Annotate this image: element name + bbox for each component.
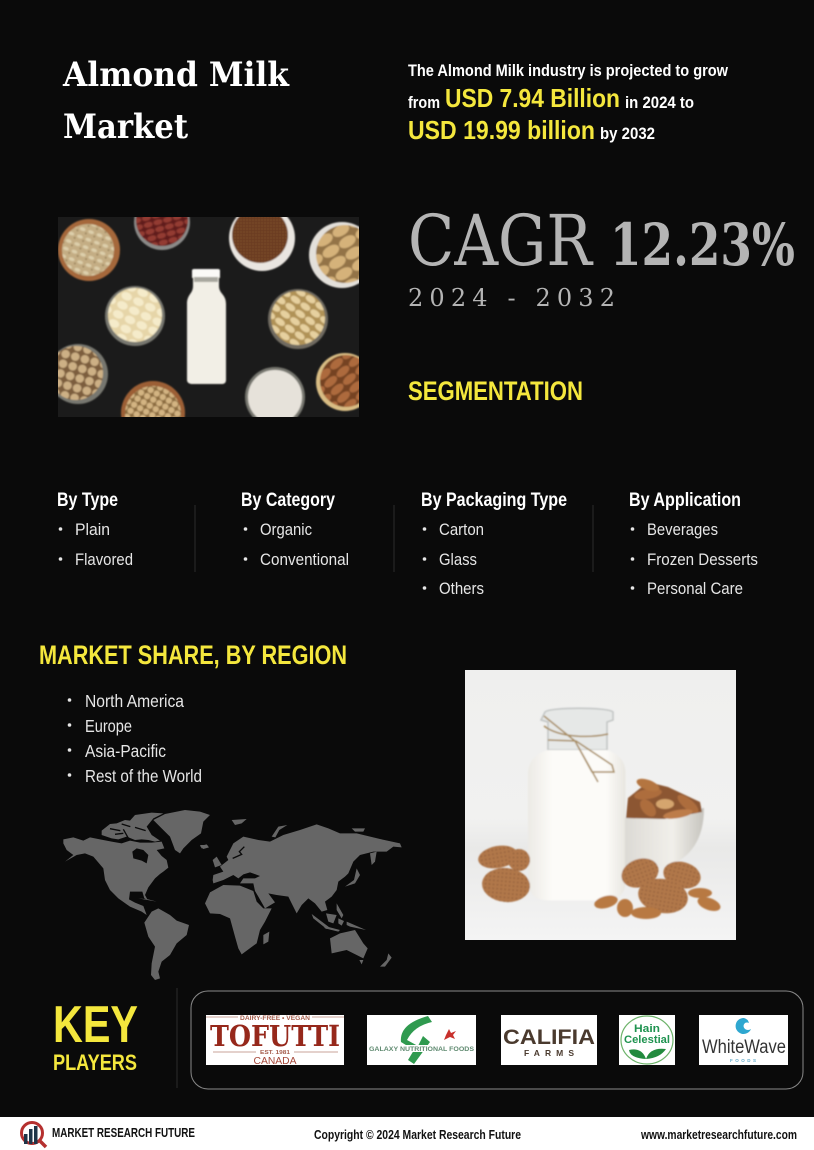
Europe, Africa, Asia and Oceania — [200, 819, 402, 967]
footer copyright: Copyright © 2024 Market Research Future — [314, 1127, 521, 1142]
bowl — [625, 808, 704, 866]
segmentation: by type — [57, 490, 133, 569]
milk bottle — [187, 269, 226, 384]
CAGR figure — [408, 200, 795, 282]
region list: Asia-Pacific — [85, 741, 166, 761]
title: Almond Milk — [62, 55, 290, 95]
logo: Hain Celestial: Hain — [634, 1023, 660, 1035]
segmentation: by packaging type: Others — [439, 579, 484, 598]
segmentation: by category: Conventional — [260, 550, 349, 569]
bowl: hazelnuts — [58, 343, 109, 405]
loose almonds — [593, 888, 722, 919]
footer — [0, 1117, 814, 1150]
logo: WhiteWave Foods: WhiteWave — [702, 1037, 786, 1058]
segmentation: by category: By Category — [241, 490, 335, 511]
logo: Califia Farms: CALIFIA — [503, 1026, 595, 1049]
forecast period: 2024 - 2032 — [408, 284, 615, 312]
logo: Hain Celestial: Celestial — [624, 1034, 670, 1046]
segmentation: by type: Plain — [75, 520, 110, 539]
segmentation: by packaging type: Carton — [439, 520, 484, 539]
headline forecast text: USD 19.99 billion — [408, 115, 595, 145]
logo: Galaxy Nutritional Foods — [367, 1015, 476, 1065]
footer brand: MARKET RESEARCH FUTURE — [52, 1125, 195, 1140]
key players heading: KEY — [53, 996, 138, 1054]
logo: Hain Celestial — [619, 1015, 675, 1065]
bowl: white flour — [244, 366, 306, 417]
bowl: buckwheat — [228, 217, 296, 272]
logo: Tofutti — [206, 1015, 344, 1067]
logo: WhiteWave Foods — [699, 1015, 788, 1065]
world map — [63, 810, 402, 980]
bowl: peanuts — [308, 221, 359, 289]
key players heading: PLAYERS — [53, 1050, 137, 1075]
segmentation: by application: Beverages — [647, 520, 718, 539]
photo: plant milk bottle and bowls — [58, 217, 359, 417]
Americas and Greenland — [63, 810, 210, 980]
region list — [68, 691, 202, 786]
segmentation: by application: Personal Care — [647, 579, 743, 598]
bowl: oats — [58, 219, 120, 281]
segmentation: by packaging type: Glass — [439, 550, 477, 569]
shelled almonds — [476, 843, 704, 917]
twine — [544, 716, 614, 782]
headline forecast text — [408, 61, 729, 145]
panel: key player logos — [191, 991, 803, 1089]
logo: Tofutti: EST. 1981 — [260, 1050, 290, 1056]
bowl: coconut — [105, 286, 165, 346]
almonds in bowl — [626, 776, 702, 821]
segmentation: by type: By Type — [57, 490, 118, 511]
logo: Tofutti: DAIRY-FREE • VEGAN — [240, 1016, 310, 1022]
bowl: cashews — [268, 289, 328, 349]
title — [62, 55, 290, 147]
footer logo icon — [22, 1122, 46, 1147]
region list: Europe — [85, 716, 132, 736]
bowl: almonds — [315, 352, 359, 412]
segmentation: by type: Flavored — [75, 550, 133, 569]
region list: Rest of the World — [85, 766, 202, 786]
photo: milk jar and almonds — [465, 670, 736, 940]
title: Market — [63, 107, 188, 147]
bowl: red beans — [133, 217, 191, 251]
jar of milk — [528, 750, 626, 900]
segmentation: by application — [629, 490, 758, 598]
logo: Tofutti: CANADA — [254, 1056, 297, 1067]
heading: market share by region: MARKET SHARE, BY REGION — [39, 640, 347, 670]
headline forecast text: USD 7.94 Billion — [445, 83, 620, 113]
logo: WhiteWave Foods: FOODS — [730, 1058, 756, 1063]
logo: Califia Farms — [501, 1015, 597, 1065]
segmentation: by application: By Application — [629, 490, 741, 511]
heading: segmentation: SEGMENTATION — [408, 376, 583, 406]
headline forecast text: from — [408, 93, 440, 112]
segmentation: by packaging type — [421, 490, 567, 598]
headline forecast text: in 2024 to — [625, 93, 694, 112]
headline forecast text: by 2032 — [600, 124, 655, 143]
bowl: chickpeas — [120, 380, 186, 417]
logo: Galaxy Nutritional Foods: GALAXY NUTRITIONAL FOODS — [369, 1047, 474, 1053]
logo: Califia Farms: FARMS — [524, 1048, 574, 1058]
key players heading — [53, 996, 138, 1075]
segmentation: by packaging type: By Packaging Type — [421, 490, 567, 511]
logo: Tofutti: TOFUTTI — [210, 1019, 340, 1053]
region list: North America — [85, 691, 184, 711]
segmentation: by category: Organic — [260, 520, 312, 539]
segmentation: by category — [241, 490, 349, 569]
segmentation: by application: Frozen Desserts — [647, 550, 758, 569]
CAGR figure: CAGR — [408, 200, 594, 282]
headline forecast text: The Almond Milk industry is projected to grow — [408, 61, 729, 80]
jar neck — [541, 708, 613, 750]
